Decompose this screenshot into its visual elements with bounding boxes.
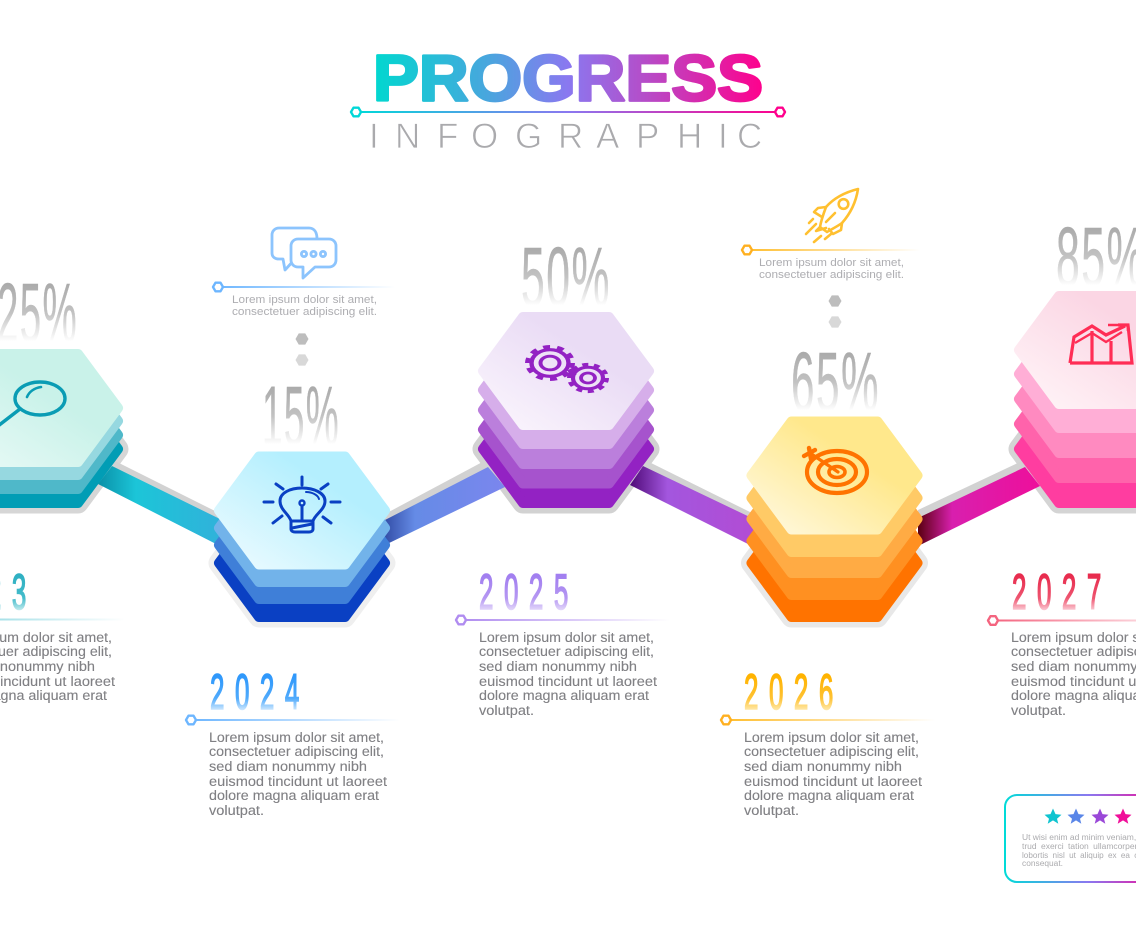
rating text <box>1022 833 1136 868</box>
text block: 2027: 2027 <box>1012 565 1112 620</box>
connector: 2026 to 2027 <box>918 461 1040 546</box>
text block: 2026: 2026 <box>744 665 844 720</box>
text block: 2024: dolore magna aliquam erat <box>209 788 379 803</box>
text block: 2025: euismod tincidunt ut laoreet <box>479 674 657 689</box>
connector: 2024 to 2025 <box>385 459 505 545</box>
text block: 2025: 2025 <box>479 565 579 620</box>
icon: target <box>804 448 867 493</box>
hexagon stack: 2025 purple <box>483 317 649 503</box>
callout: chat note <box>213 283 395 318</box>
text block: 2024: consectetuer adipiscing elit, <box>209 744 384 759</box>
callout: chat note: Lorem ipsum dolor sit amet, <box>232 294 377 306</box>
stars <box>1044 808 1132 824</box>
hexagon stack: 2027 pink <box>1019 296 1136 503</box>
callout: rocket note: Lorem ipsum dolor sit amet, <box>759 257 904 269</box>
icon: rocket <box>806 189 858 242</box>
text block: 2026: Lorem ipsum dolor sit amet, <box>744 730 919 745</box>
text: 15% <box>262 369 340 463</box>
icon: light bulb <box>264 477 340 532</box>
text block: 2024: euismod tincidunt ut laoreet <box>209 774 387 789</box>
icon: gears <box>528 347 606 391</box>
title divider with end nodes <box>351 108 785 116</box>
text block: 2025: Lorem ipsum dolor sit amet, <box>479 630 654 645</box>
text block: 2026: volutpat. <box>744 803 799 818</box>
connector: 2023 to 2024 <box>98 461 225 547</box>
text block: 2024: Lorem ipsum dolor sit amet, <box>209 730 384 745</box>
text block: 2025 <box>456 565 670 718</box>
text block: 2026: dolore magna aliquam erat <box>744 788 914 803</box>
rating card <box>1005 795 1136 882</box>
icon: speech bubbles <box>272 228 336 278</box>
text block: 2026: consectetuer adipiscing elit, <box>744 744 919 759</box>
text block: 2026: euismod tincidunt ut laoreet <box>744 774 922 789</box>
text block: 2024: 2024 <box>210 665 310 720</box>
text block: 2024 <box>186 665 400 818</box>
text block: 2023 <box>0 565 125 703</box>
connector: 2025 to 2026 <box>630 460 756 546</box>
rating text: consequat. <box>1022 859 1063 868</box>
connector dots above 65% <box>828 295 842 328</box>
text block: 2025: volutpat. <box>479 703 534 718</box>
hexagon stack: 2023 teal <box>0 354 118 503</box>
callout: rocket note: consectetuer adipiscing elit. <box>759 269 904 281</box>
hexagon stack: 2024 blue <box>219 456 385 617</box>
text block: 2025: dolore magna aliquam erat <box>479 688 649 703</box>
text block: 2024: volutpat. <box>209 803 264 818</box>
percent: 50%: 50% <box>521 230 611 324</box>
text block: 2024: sed diam nonummy nibh <box>209 759 367 774</box>
callout: rocket note <box>742 246 920 281</box>
text: 25% <box>0 266 78 360</box>
connector dots above 15% <box>296 333 308 366</box>
hexagon stack: 2026 orange <box>752 422 918 617</box>
text block: 2026: sed diam nonummy nibh <box>744 759 902 774</box>
text block: 2025: sed diam nonummy nibh <box>479 659 637 674</box>
subtitle: INFOGRAPHIC: INFOGRAPHIC <box>369 117 762 156</box>
percent: 65%: 65% <box>791 335 880 429</box>
callout: chat note: consectetuer adipiscing elit. <box>232 306 377 318</box>
title: PROGRESS: PROGRESS <box>373 42 763 114</box>
text block: 2025: consectetuer adipiscing elit, <box>479 644 654 659</box>
text block: 2027: volutpat. <box>1011 703 1066 718</box>
icon: chart with arrow <box>1070 325 1132 363</box>
text block: 2026 <box>721 665 935 818</box>
icon: magnifier <box>0 382 65 426</box>
hexagon shadow halos <box>0 395 1136 617</box>
text block: 2027 <box>988 565 1136 718</box>
